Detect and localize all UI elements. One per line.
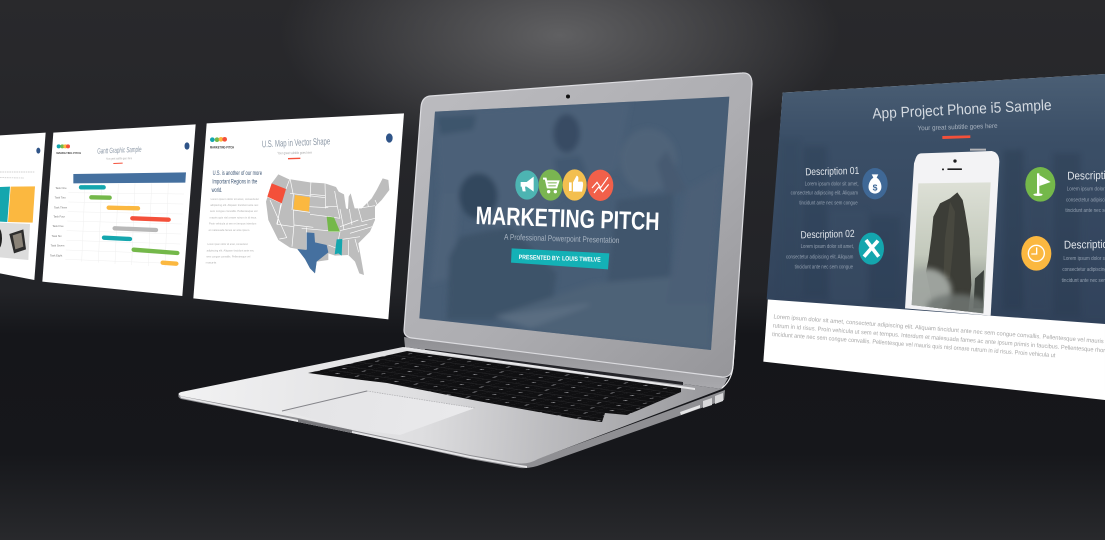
gantt row labels: Task Two	[55, 196, 66, 200]
oregon	[267, 183, 286, 203]
accent bar	[113, 163, 123, 164]
logo icons	[515, 169, 613, 201]
slide logo dot	[36, 148, 40, 154]
description 01: tincidunt ante nec sem congue	[799, 200, 858, 206]
description 02: tincidunt ante nec sem congue	[795, 264, 853, 270]
blonde woman	[620, 128, 677, 192]
heading text: Important Regions in the	[212, 179, 258, 186]
icon: thumbs up	[563, 169, 587, 201]
screen background	[419, 97, 729, 350]
laptop	[178, 73, 752, 468]
slide subtitle: Your great subtitle goes here	[106, 156, 132, 161]
gantt row labels: Task Five	[52, 224, 64, 228]
phone speaker	[942, 168, 962, 170]
body text: Lorem ipsum dolor sit amet, consectetur	[207, 242, 248, 246]
texas	[297, 232, 328, 273]
hinge	[404, 337, 728, 389]
side ports	[680, 393, 723, 415]
phone mockup	[902, 149, 999, 319]
page number	[386, 133, 393, 143]
icon: money bag	[862, 168, 888, 199]
desk and papers	[511, 277, 706, 350]
product photo	[0, 228, 26, 253]
wyoming	[293, 195, 310, 212]
yellow panel	[8, 186, 35, 223]
laptop lid	[404, 73, 752, 377]
body text: mauris quis nisl ornare rutrum in id risus.	[210, 215, 257, 219]
missouri	[327, 217, 340, 232]
description 01: Description 01	[805, 166, 860, 178]
slide title: Gantt Graphic Sample	[97, 145, 142, 156]
lid corner rim	[722, 340, 735, 388]
gantt row labels: Task Three	[54, 205, 68, 209]
heading text	[211, 170, 262, 194]
slide logo	[210, 137, 234, 149]
description 01: consectetur adipiscing elit. Aliquam	[791, 191, 858, 197]
presenter banner: PRESENTED BY: LOUIS TWELVE	[519, 254, 601, 264]
body text: sem congue convallis. Pellentesque vel	[210, 209, 258, 213]
gantt row labels: Task One	[55, 186, 67, 190]
base side edge	[178, 390, 725, 468]
phone camera	[953, 159, 957, 163]
man	[459, 173, 498, 219]
city photo header	[767, 74, 1105, 324]
main title: MARKETING PITCH	[475, 202, 660, 236]
body text: Proin vehicula ut sem et tempus interdum	[209, 222, 257, 226]
footer text: tincidunt ante nec sem congue convallis. Pellentesque vel mauris quis nisl ornare rutrum in id risus. Proin vehicula ut	[772, 332, 1056, 359]
icon: crossed tools	[859, 233, 884, 265]
icon: money bag: $	[873, 182, 878, 192]
photo panel	[0, 223, 30, 260]
description 02: consectetur adipiscing elit. Aliquam	[786, 254, 854, 260]
keyboard	[308, 351, 681, 422]
gantt row labels: Task Six	[52, 234, 62, 238]
white slide base	[763, 74, 1105, 400]
gantt row labels: Task Four	[53, 215, 65, 219]
mississippi	[335, 239, 342, 256]
laptop base	[178, 337, 728, 468]
slide title: App Project Phone i5 Sample	[872, 97, 1052, 123]
slide subtitle: Your great subtitle goes here	[918, 123, 998, 132]
subtitle: A Professional Powerpoint Presentation	[504, 232, 620, 245]
heading text: world.	[211, 187, 222, 194]
laptop screen	[419, 97, 729, 350]
slide subtitle: Your great subtitle goes here	[277, 151, 312, 155]
page number	[184, 142, 189, 150]
description 02	[786, 229, 855, 270]
webcam	[566, 94, 570, 98]
slide logo	[56, 144, 81, 155]
gantt grid	[65, 183, 184, 267]
body text: mauris	[206, 260, 217, 264]
slide text lines	[0, 172, 35, 178]
description 03	[1065, 170, 1105, 214]
gantt header	[73, 172, 186, 183]
body text: adipiscing elit. Aliquam tincidunt ante nec	[207, 248, 254, 252]
accent bar	[288, 158, 300, 159]
phone screen photo	[912, 182, 991, 313]
icon: trend line	[587, 170, 613, 201]
slide: gantt graphic sample	[42, 124, 196, 296]
phone body	[905, 151, 999, 316]
body text: et malesuada fames ac ante ipsum.	[209, 228, 250, 232]
photo of meeting	[430, 102, 722, 350]
body text	[206, 197, 259, 264]
trackpad top edge	[282, 391, 367, 411]
body text: Lorem ipsum dolor sit amet, consectetur	[211, 197, 259, 201]
base front highlight	[180, 396, 527, 468]
body text: adipiscing elit. Aliquam tincidunt ante nec	[210, 203, 259, 207]
standing woman	[553, 114, 580, 153]
description 01	[791, 166, 860, 206]
state borders	[267, 178, 377, 255]
description 01: Lorem ipsum dolor sit amet,	[805, 182, 859, 188]
trackpad	[282, 391, 475, 435]
map base	[266, 174, 389, 275]
base top surface	[178, 347, 722, 464]
slide logo: MARKETING PITCH	[56, 151, 81, 155]
heading text: U.S. is another of our more	[213, 170, 262, 177]
white monitor	[667, 170, 722, 303]
accent bar	[942, 135, 970, 139]
gantt row labels: Task Eight	[50, 253, 63, 257]
gantt row labels: Task Seven	[51, 244, 65, 248]
slide: product page, far left	[0, 133, 46, 280]
gantt bars	[81, 187, 177, 264]
slide title: U.S. Map in Vector Shape	[262, 136, 330, 150]
slide: u.s. map	[193, 113, 404, 319]
description 02: Lorem ipsum dolor sit amet,	[801, 244, 854, 250]
description 04	[1062, 239, 1105, 284]
front notch	[298, 419, 352, 433]
icon: shopping cart	[539, 169, 563, 201]
mist	[912, 265, 955, 308]
us map	[266, 174, 389, 275]
body text: sem congue convallis. Pellentesque vel	[206, 254, 251, 258]
presenter banner	[511, 248, 609, 269]
gantt row labels	[50, 186, 68, 257]
icon: flag	[1025, 167, 1055, 202]
slide logo: MARKETING PITCH	[210, 145, 234, 149]
teal panel	[0, 187, 10, 222]
icon: megaphone	[515, 170, 539, 200]
hinge gap	[425, 349, 683, 385]
trackpad dotted edge	[367, 391, 475, 408]
description 02: Description 02	[800, 229, 855, 241]
keyboard highlight	[403, 347, 695, 390]
slide: app project phone sample	[763, 74, 1105, 400]
phone top button	[970, 149, 986, 151]
city silhouettes	[1006, 152, 1076, 222]
rock spire	[912, 192, 984, 314]
icon: clock	[1021, 236, 1051, 271]
